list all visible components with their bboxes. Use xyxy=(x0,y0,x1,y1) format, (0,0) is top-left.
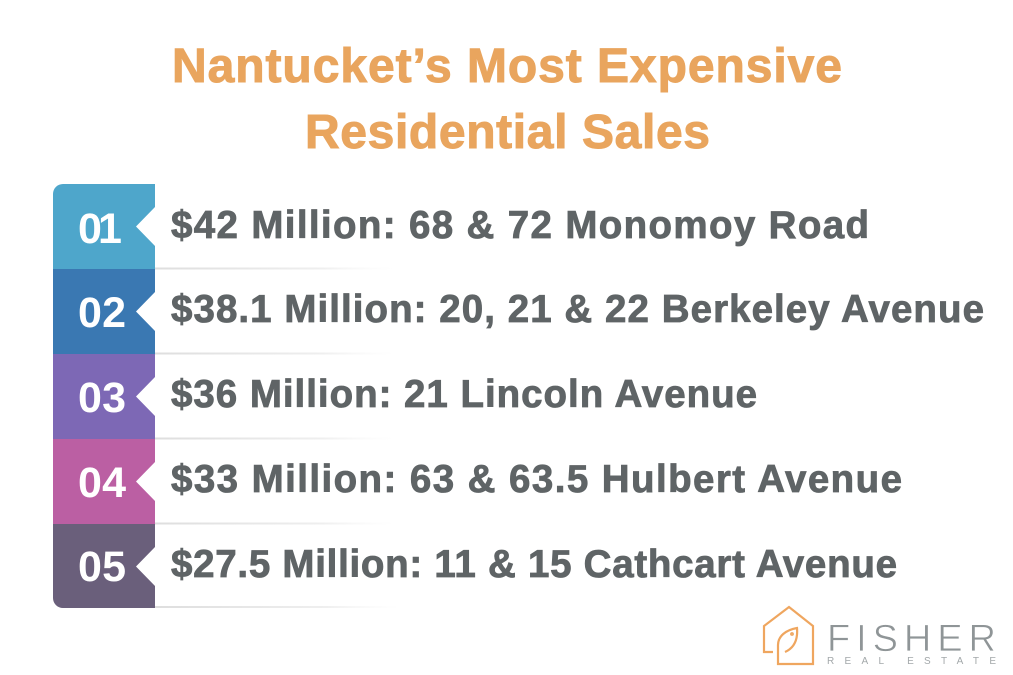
icon: house with fish xyxy=(764,607,813,664)
divider lines xyxy=(155,268,400,608)
row 5 xyxy=(53,524,897,608)
row 4: 04 xyxy=(78,459,126,507)
ranked list xyxy=(53,184,984,608)
row 2: $38.1 Million: 20, 21 & 22 Berkeley Avenue xyxy=(171,288,984,331)
row 5: $27.5 Million: 11 & 15 Cathcart Avenue xyxy=(171,543,897,586)
row 1: 01 xyxy=(78,205,122,253)
row 1: $42 Million: 68 & 72 Monomoy Road xyxy=(171,204,869,247)
row 2: 02 xyxy=(78,289,126,337)
row 3: 03 xyxy=(78,374,126,422)
title xyxy=(172,40,842,159)
row 2 xyxy=(53,269,984,354)
tagline: REAL ESTATE xyxy=(827,656,996,667)
title: Nantucket’s Most Expensive xyxy=(172,40,842,93)
wordmark: FISHER xyxy=(827,618,996,660)
row 1 xyxy=(53,184,869,269)
row 4 xyxy=(53,439,902,524)
title: Residential Sales xyxy=(305,106,710,159)
row 3: $36 Million: 21 Lincoln Avenue xyxy=(171,373,757,416)
row 5: 05 xyxy=(78,543,126,591)
row 3 xyxy=(53,354,757,439)
logo: Fisher Real Estate xyxy=(764,607,996,667)
row 4: $33 Million: 63 & 63.5 Hulbert Avenue xyxy=(171,458,902,501)
